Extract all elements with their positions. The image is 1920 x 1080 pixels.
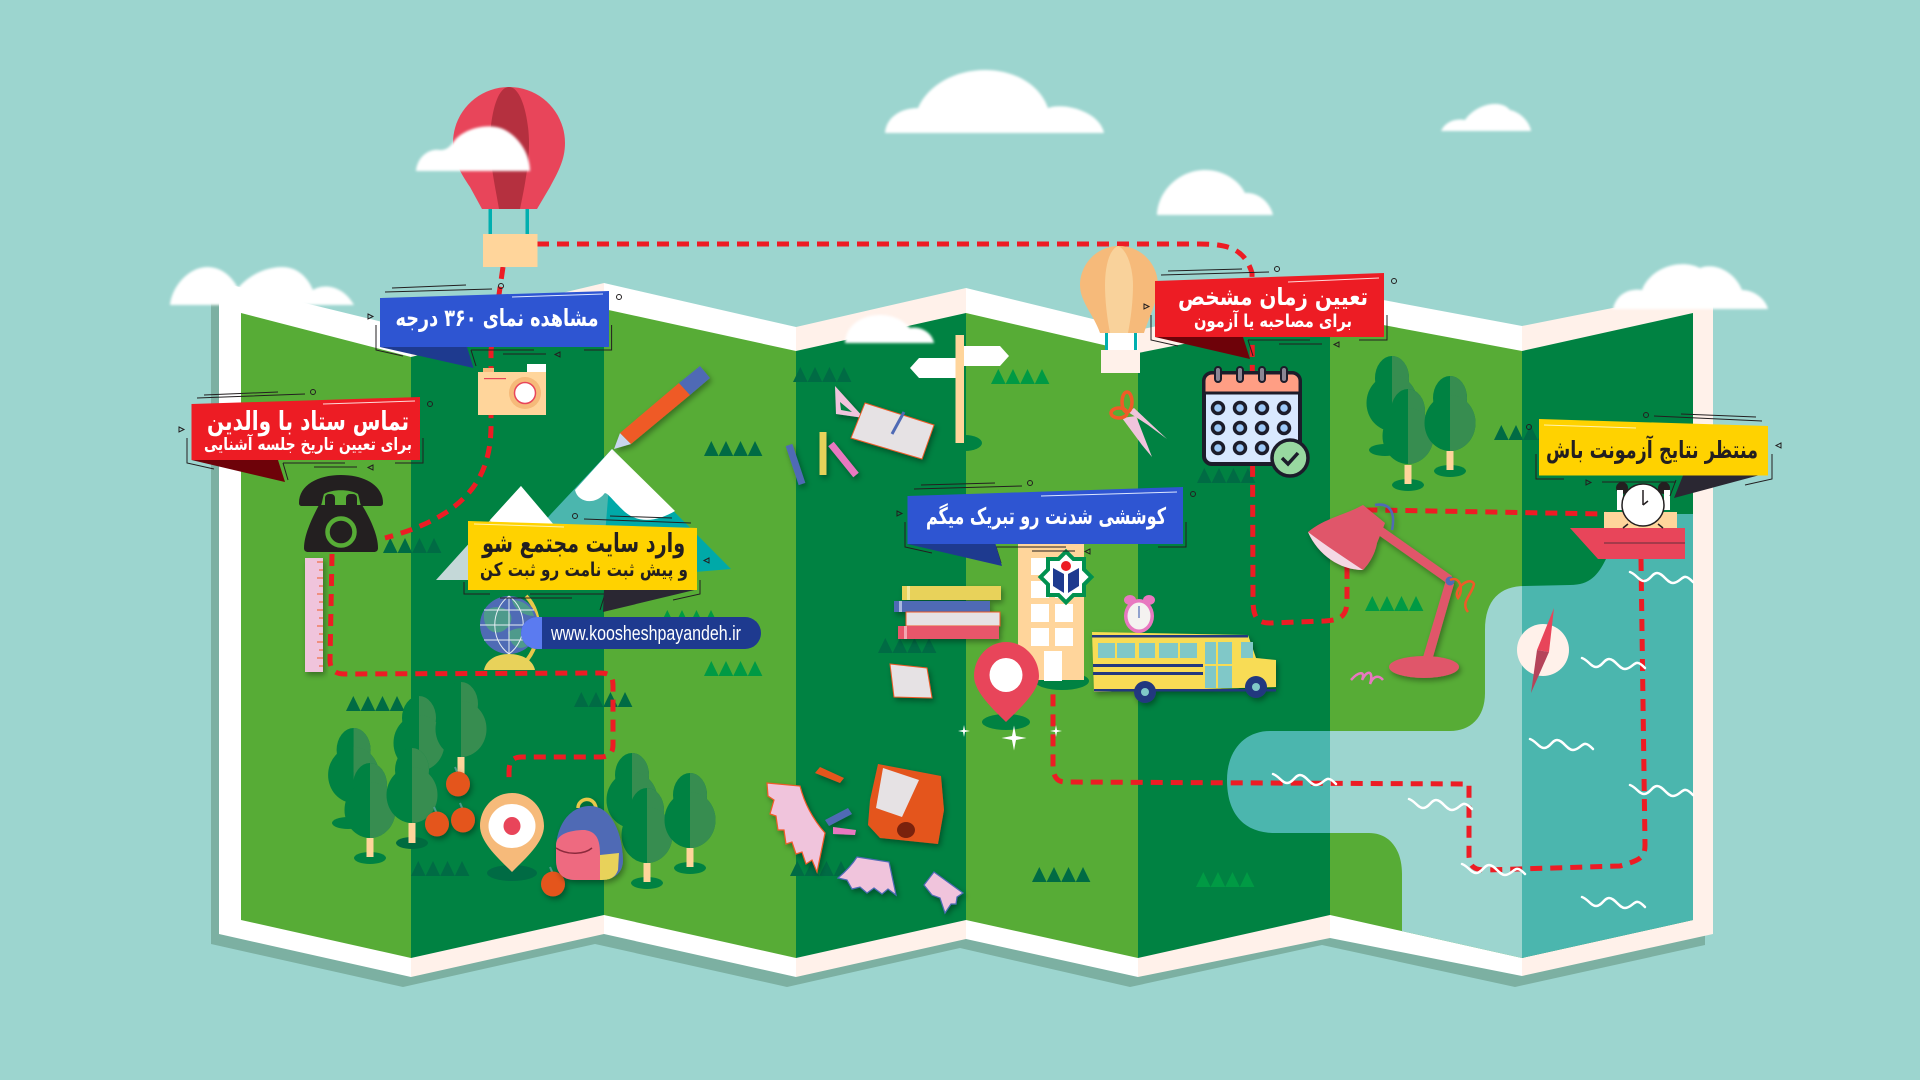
icon: orange location pin [480,793,544,881]
icon: red location pin [974,642,1039,730]
scribble: pink [1351,673,1383,684]
icon: ship with alarm clock [1570,482,1685,559]
sparkles [958,725,1062,750]
scribble: orange [1450,579,1474,612]
icon: notepad [890,664,932,698]
river and sea [1227,514,1693,958]
website address pill: www.koosheshpayandeh.ir [550,623,741,645]
trees: right group [1366,356,1476,491]
icon: ruler [305,558,323,672]
icon: globe [480,596,538,670]
icon: compass [1517,608,1569,693]
route: dashed red paths [330,244,1645,870]
label: visit website: وارد سایت مجتمع شو [481,529,685,559]
infographic: school admission road map [168,68,1782,987]
website address pill [521,617,761,649]
icon: pink alarm clock [1124,595,1155,633]
hot air balloon: red [453,87,565,267]
clouds [170,70,1768,343]
icon: open book with set square and crayons [789,386,934,484]
label: contact staff: تماس ستاد با والدین [207,407,409,437]
icon: pencil [614,366,710,449]
label: congratulations: کوششی شدنت رو تبریک میگم [926,503,1166,530]
label: set interview time [1144,266,1396,359]
icon: desk lamp [1308,505,1459,678]
sea waves [1273,572,1693,908]
label: wait for results: منتظر نتایج آزمونت باش [1546,435,1758,464]
icon: scissors [1111,392,1167,457]
icon: stack of books [894,586,1001,639]
map: green fold panels [241,309,1693,958]
icon: calendar with check mark [1204,367,1308,476]
icon: telephone [299,475,383,552]
hot air balloon: orange [1080,246,1158,373]
label: 360 view: مشاهده نمای ۳۶۰ درجه [396,304,598,332]
label: congratulations [897,480,1196,566]
label: set interview time: تعیین زمان مشخص [1178,283,1368,311]
icon: pencil shavings [767,767,963,913]
map: folded paper shadow [211,300,1705,987]
label: visit website [464,514,709,612]
trees: left group [328,682,716,889]
label: contact staff: برای تعیین تاریخ جلسه آشنایی [204,433,412,455]
icon: apples [425,767,565,896]
icon: camera [478,364,546,415]
icon: school bus [1092,632,1276,703]
label: 360 view [368,284,622,368]
icon: signpost [910,335,1009,451]
label: wait for results [1526,412,1781,498]
icon: pencil sharpener [868,764,944,844]
label: set interview time: برای مصاحبه یا آزمون [1194,309,1352,332]
grass tufts [346,367,1552,887]
icon: school building [1018,544,1089,690]
map: paper border [219,282,1713,977]
label: contact staff [179,390,432,482]
label: visit website: و پیش ثبت نامت رو ثبت کن [480,559,688,581]
icon: school logo [1038,549,1094,605]
icon: backpack [556,799,623,880]
mountains [436,449,731,590]
